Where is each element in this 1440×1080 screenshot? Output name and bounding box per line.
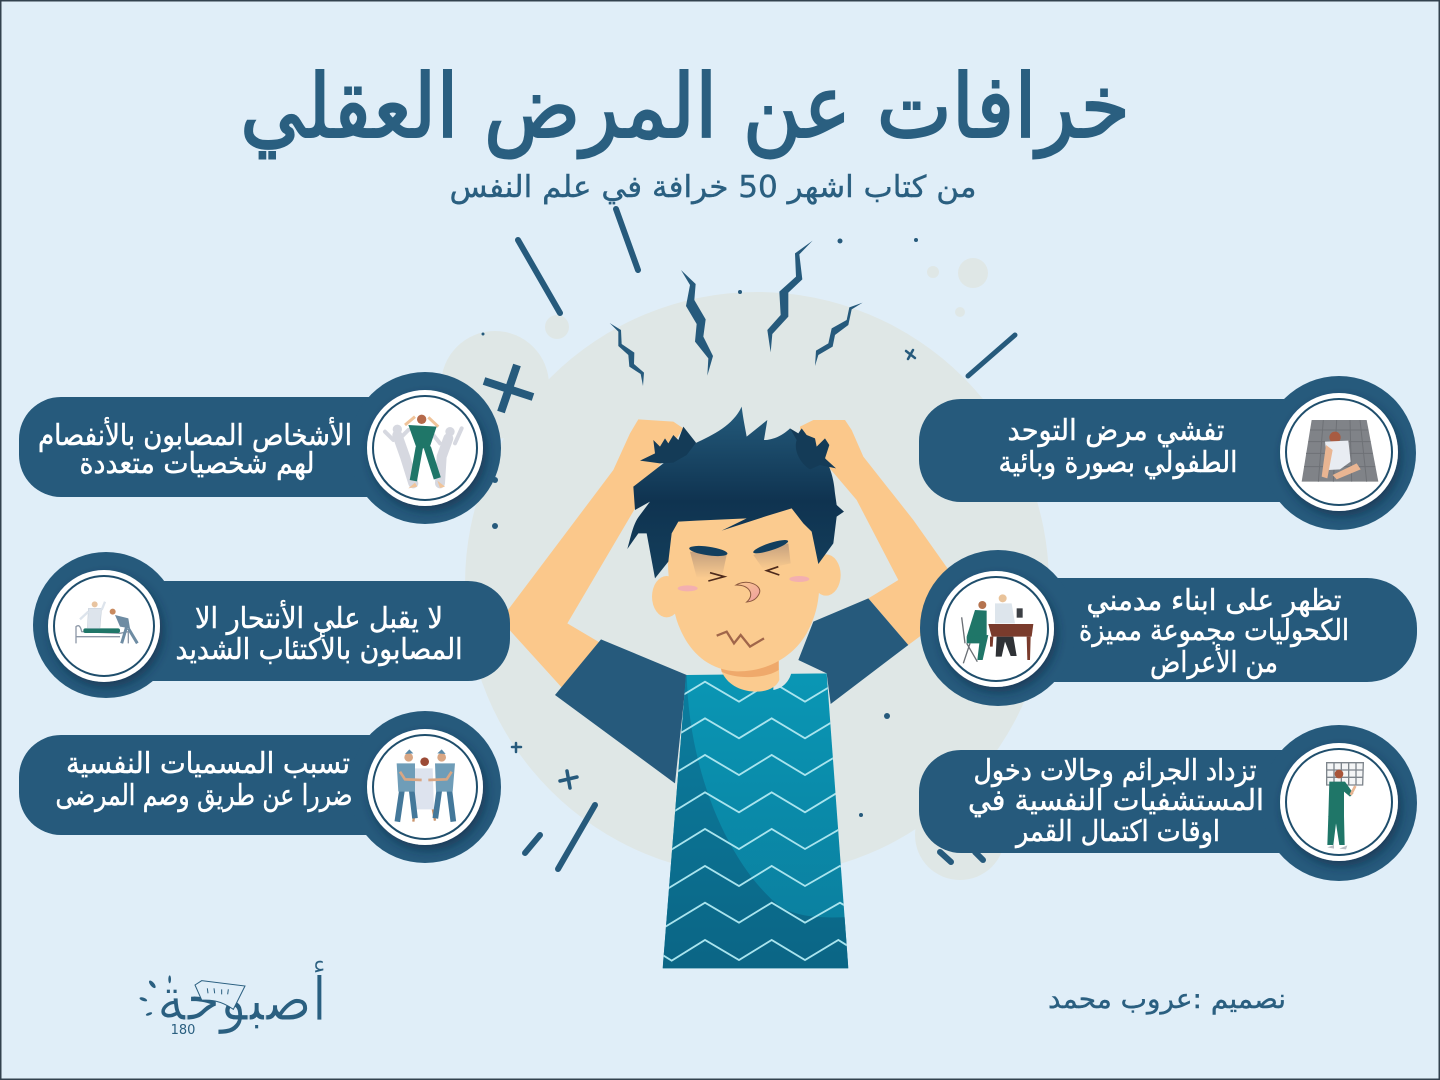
- sleeves: [555, 598, 908, 783]
- shirt with zigzag pattern: [660, 667, 853, 970]
- collar gap and neck: [773, 665, 792, 690]
- panel: autism myth: [919, 376, 1416, 530]
- text: لهم شخصيات متعددة: [80, 446, 314, 481]
- text: من الأعراض: [1150, 643, 1278, 679]
- text: تزداد الجرائم وحالات دخول: [974, 753, 1256, 788]
- text: الكحوليات مجموعة مميزة: [1079, 613, 1349, 647]
- panel: suicide myth: [33, 552, 510, 698]
- eye shadows: [690, 552, 727, 578]
- icon: person crouched on padded mat: [1302, 420, 1378, 482]
- designer credit: نصميم :عروب محمد: [1048, 984, 1286, 1015]
- text: لا يقبل على الأنتحار الا: [195, 599, 443, 635]
- panel: labels harm myth: [19, 711, 501, 863]
- icon: patient and doctor at desk: [962, 594, 1033, 663]
- icon: doctor and patient on bed: [76, 601, 137, 643]
- closed eyes: [708, 567, 779, 581]
- central figure: stressed boy: [504, 407, 960, 970]
- text: اوقات اكتمال القمر: [1014, 814, 1220, 848]
- text: [968, 753, 1264, 848]
- cheeks: [678, 585, 698, 591]
- mouth: [717, 632, 764, 647]
- text: المستشفيات النفسية في: [968, 783, 1264, 818]
- decorative lines, crosses and dots: [482, 209, 1015, 869]
- ears: [652, 576, 681, 617]
- text: [38, 416, 352, 481]
- hair: [627, 407, 844, 578]
- text: [1079, 583, 1349, 679]
- stress zigzag marks: [610, 241, 863, 386]
- icon: patient at barred window: [1327, 763, 1363, 849]
- logo: أصبوحة: [157, 960, 327, 1035]
- icon: two orderlies holding a patient: [397, 749, 455, 822]
- subtitle: من كتاب اشهر 50 خرافة في علم النفس: [450, 170, 977, 205]
- text: [56, 746, 352, 813]
- text: تفشي مرض التوحد: [1008, 413, 1224, 448]
- hair tufts in hands: [640, 427, 696, 463]
- nose: [736, 582, 760, 602]
- text: تسبب المسميات النفسية: [66, 746, 350, 780]
- text: [998, 413, 1238, 480]
- panel: schizophrenia myth: [19, 372, 501, 524]
- text: الطفولي بصورة وبائية: [998, 445, 1238, 480]
- title: خرافات عن المرض العقلي: [240, 55, 1130, 159]
- text: 180: 180: [171, 1023, 195, 1038]
- left arm: [504, 419, 683, 697]
- text: المصابون بالأكتئاب الشديد: [176, 630, 462, 666]
- text: الأشخاص المصابون بالأنفصام: [38, 416, 352, 452]
- text: ضررا عن طريق وصم المرضى: [56, 778, 352, 813]
- panel: full moon myth: [919, 725, 1417, 881]
- right arm: [800, 420, 960, 645]
- icon: figure with ghost personalities: [385, 415, 462, 488]
- text: [176, 599, 462, 666]
- face: [668, 507, 820, 671]
- background circle and blobs: [441, 258, 1049, 880]
- eyebrows: [689, 544, 728, 558]
- panel: alcoholics children myth: [920, 550, 1417, 706]
- icon: sun rays and book: [139, 975, 245, 1016]
- text: تظهر على ابناء مدمني: [1086, 583, 1342, 618]
